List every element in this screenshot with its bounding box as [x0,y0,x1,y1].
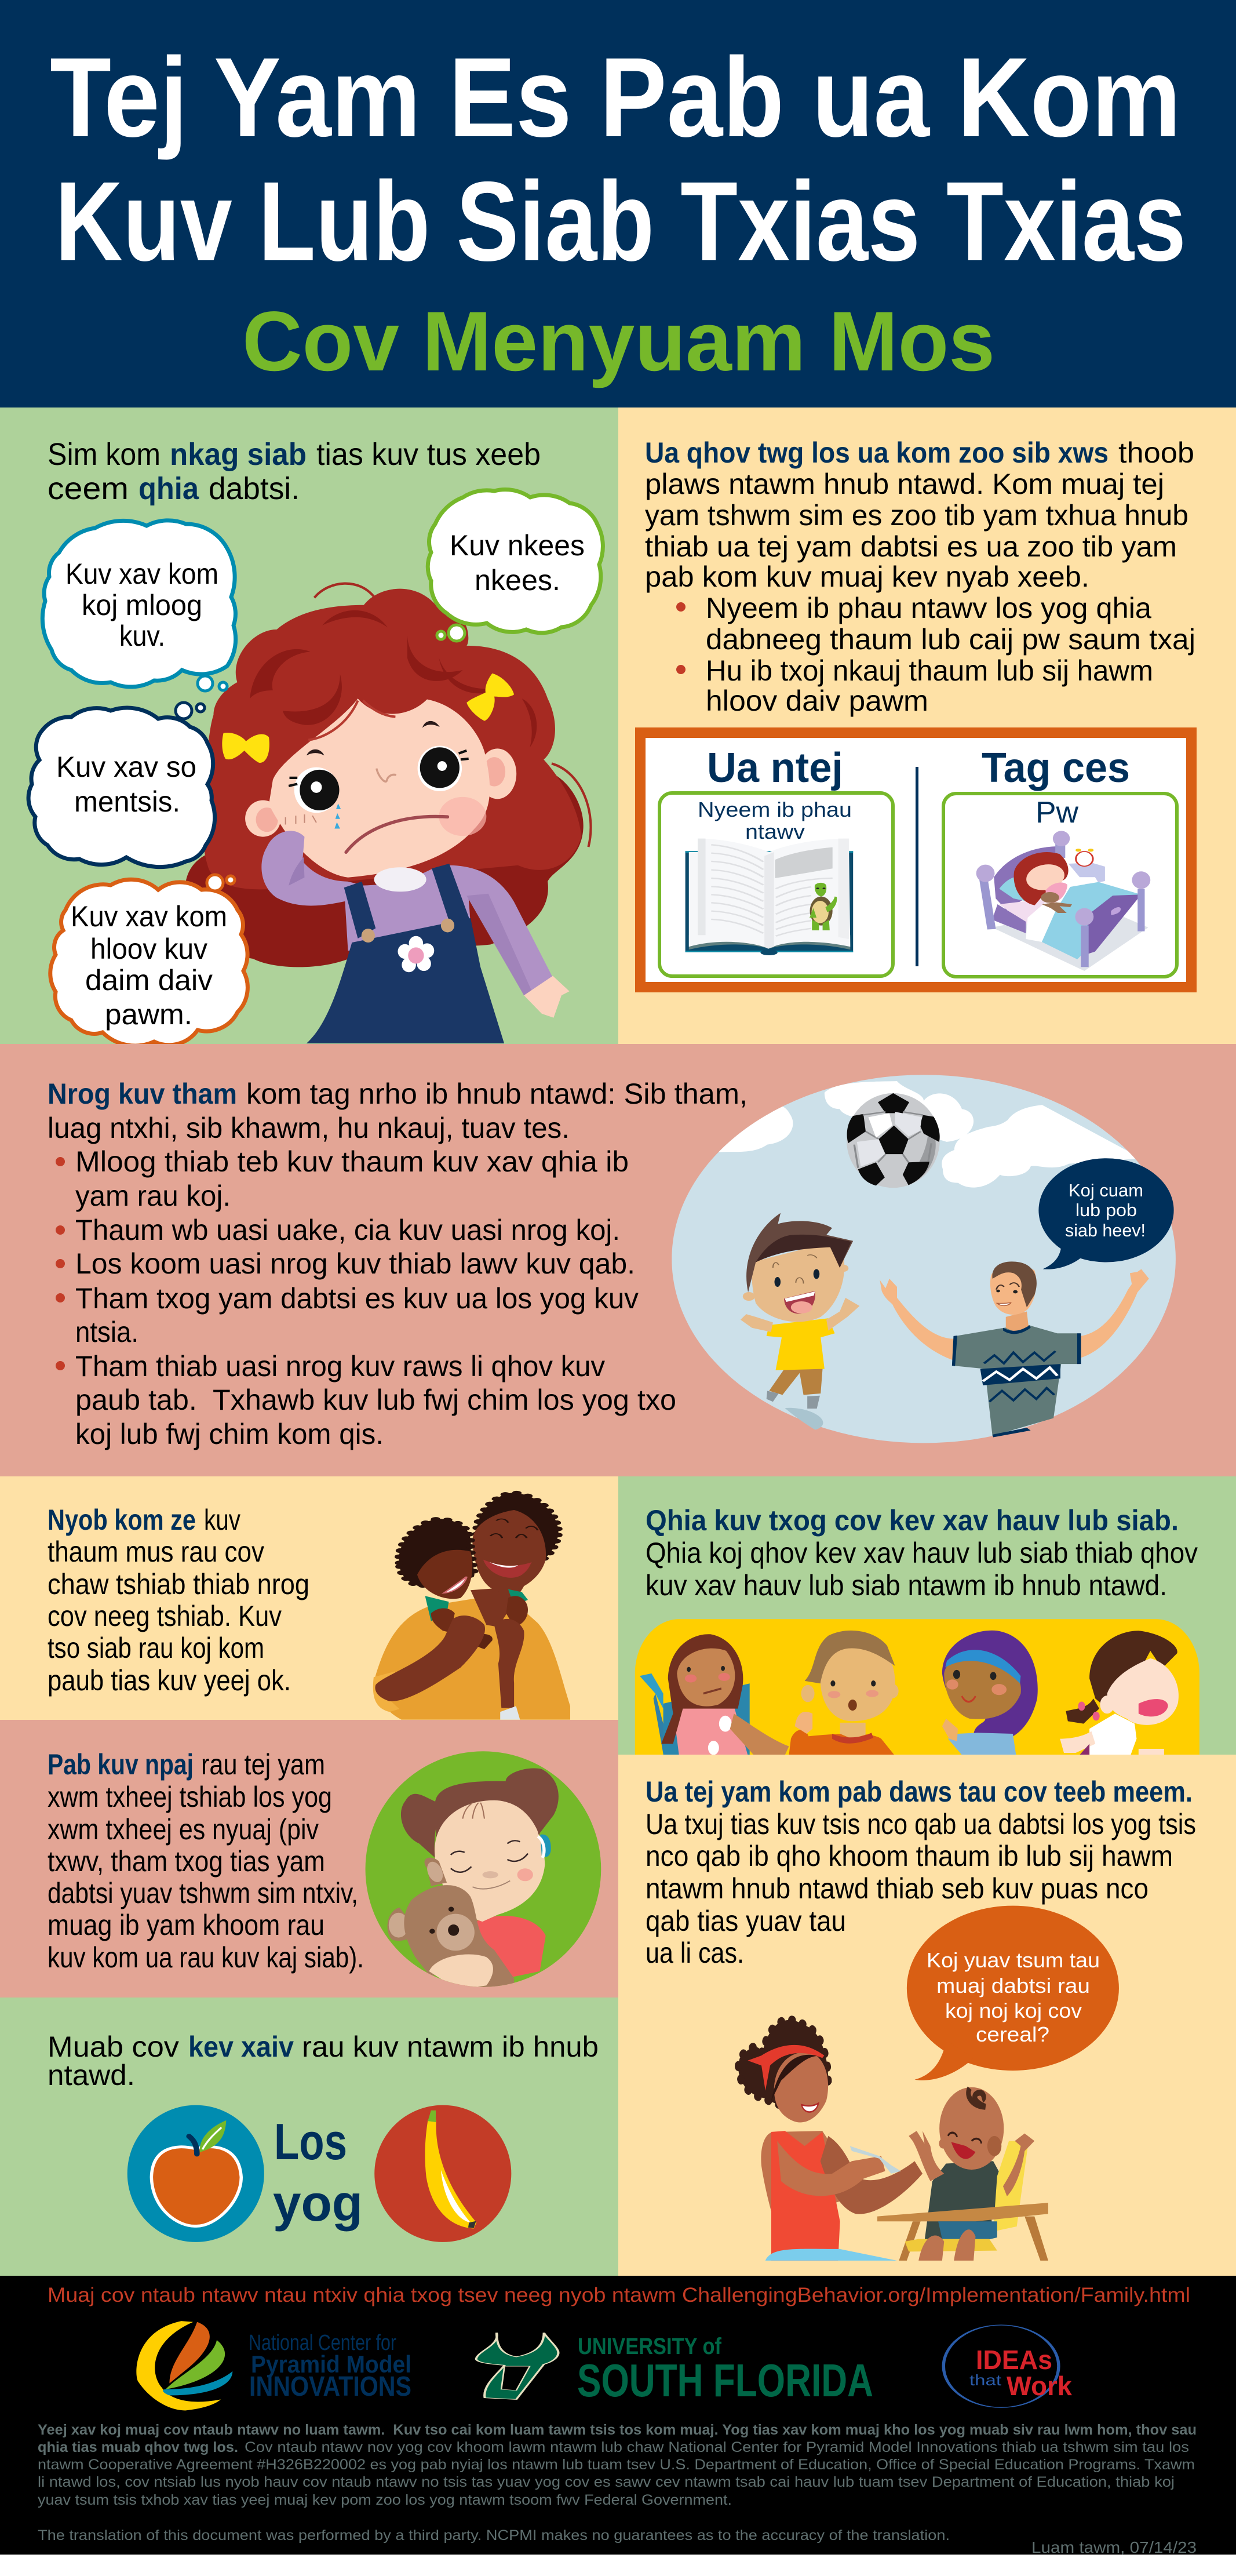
panel: routine [618,407,1236,1044]
card: read a book: ntawv [745,820,805,843]
father [880,1261,1149,1438]
panel: stay close [0,1476,618,1720]
card: read a book: Nyeem ib phau [698,798,852,821]
subtitle: Cov Menyuam Mos [242,294,995,388]
prepare text: rau tej yam [201,1748,325,1781]
play text: Thaum wb uasi uake, cia kuv uasi nrog koj. [75,1214,620,1246]
print date: Luam tawm, 07/14/23 [1031,2538,1197,2556]
routine text: dabneeg thaum lub caij pw saum txaj [706,623,1195,656]
stay close text: thaum mus rau cov [48,1536,264,1568]
routine text: thiab ua tej yam dabtsi es ua zoo tib yam [645,530,1177,563]
icon: apple [127,2105,264,2242]
thought bubble: navy: mentsis. [74,785,180,818]
speech bubble: orange [907,1906,1119,2080]
choices text [48,2031,599,2091]
intro text [48,437,541,506]
prepare text: xwm txheej es nyuaj (piv [48,1813,319,1846]
copyright and disclaimer: li ntawd los, cov ntsiab lus nyob hauv cov ntaub ntawv no tsis tas yuav yog cov es sawv cev ntawm tsab cai hauv lub tuam tsev Department of Education, thiab koj [38,2474,1175,2490]
prepare text: muag ib yam khoom rau [48,1909,325,1941]
intro text: ceem [48,471,129,506]
thought bubble: blue: koj mloog [82,589,202,621]
first-then board [640,733,1191,987]
routine text: thoob [1118,436,1194,469]
routine text [645,436,1195,717]
logo: University of South Florida: UNIVERSITY of [578,2334,722,2359]
copyright and disclaimer: ntawm Cooperative Agreement #H326B220002 es yog pab nyiaj los ntawm lub tuam tsev U.S. Department of Education, Office of Special Education Programs. Txawm [38,2457,1195,2473]
copyright and disclaimer: Yeej xav koj muaj cov ntaub ntawv no luam tawm. Kuv tso cai kom luam tawm tsis tos kom muaj. Yog tias xav kom muaj kho los yog muab siv rau lwm hom, thov sau [38,2422,1197,2438]
thought bubble: green [428,490,603,641]
illustration: crying girl [185,584,591,1043]
icon: child sleeping in bed [976,831,1150,971]
card: sleep [943,794,1177,977]
header panel [0,0,1236,407]
problem solving text [646,1775,1196,1969]
copyright and disclaimer: yuav tsum tsis txhob xav tias yeej muaj kev pom zoo los yog ntawm tsoom fwv Federal Government. [38,2492,732,2508]
illustration: father and son with soccer ball [672,1075,1176,1443]
problem solving text: qab tias yuav tau [646,1905,846,1937]
logo: Pyramid Model Innovations: Pyramid Model [251,2351,411,2378]
choices text: Muab cov [48,2031,179,2063]
then heading: Tag ces [982,745,1130,791]
card: sleep: Pw [1036,796,1078,829]
illustration: parent carrying child [373,1493,570,1720]
emotions text: kuv xav hauv lub siab ntawm ib hnub ntawd. [646,1569,1167,1602]
thought bubble: orange: Kuv xav kom [71,900,227,933]
panel: problem solving: cereal? [976,2022,1049,2046]
intro text: nkag siab [170,437,307,472]
choices text: ntawd. [48,2059,135,2091]
footer panel [0,2276,1236,2556]
more information link: Muaj cov ntaub ntawv ntau ntxiv qhia txog tsev neeg nyob ntawm ChallengingBehavior.org/Implementation/Family.html [48,2284,1190,2306]
thought bubble: blue: Kuv xav kom [65,558,218,590]
stay close text [48,1504,309,1697]
icon: banana [374,2105,511,2242]
logo: IDEAs that Work [943,2325,1072,2407]
panel: play together [0,1044,1236,1476]
emotions text [646,1504,1198,1602]
title [50,34,1186,285]
prepare text: txwv, tham txog tias yam [48,1845,325,1878]
label: or: yog [273,2174,363,2232]
panel: problem solving: Koj yuav tsum tau [927,1948,1100,1972]
soccer ball [847,1093,940,1188]
play text: luag ntxhi, sib khawm, hu nkauj, tuav tes. [48,1112,570,1144]
illustration: children showing emotions [635,1619,1199,1755]
prepare text: dabtsi yuav tshwm sim ntxiv, [48,1877,358,1909]
stay close text: chaw tshiab thiab nrog [48,1568,309,1600]
choices text: kev xaiv [188,2031,294,2063]
play text: kom tag nrho ib hnub ntawd: Sib tham, [246,1078,748,1110]
panel: play together: siab heev! [1065,1220,1146,1240]
logo: Pyramid Model Innovations: INNOVATIONS [249,2371,411,2402]
panel: problem solving: muaj dabtsi rau [936,1974,1090,1998]
copyright and disclaimer: qhia tias muab qhov twg los. [38,2439,238,2455]
logo: IDEAs that Work: IDEAs [976,2345,1052,2375]
play text: koj lub fwj chim kom qis. [75,1418,384,1450]
intro text: tias kuv tus xeeb [316,437,541,472]
panel: name emotions [618,1476,1236,1755]
icon: open book with turtle [686,839,853,955]
stay close text: paub tias kuv yeej ok. [48,1664,291,1697]
illustration: girl hugging teddy [366,1751,601,1996]
boy [741,1213,859,1409]
play text [48,1078,748,1450]
logo: Pyramid Model Innovations [136,2321,411,2410]
speech bubble: navy [1038,1158,1174,1269]
copyright and disclaimer [38,2422,1197,2544]
panel: play together: lub pob [1075,1200,1137,1220]
thought bubble: green: nkees. [475,564,560,596]
logo: University of South Florida: SOUTH FLORIDA [577,2355,873,2406]
play text: Tham txog yam dabtsi es kuv ua los yog kuv [75,1282,639,1315]
intro text: dabtsi. [209,471,300,506]
thought bubble: navy: Kuv xav so [56,751,196,783]
play text: ntsia. [75,1316,138,1348]
first heading: Ua ntej [707,745,843,791]
prepare text: xwm txheej tshiab los yog [48,1781,332,1813]
routine text: Ua qhov twg los ua kom zoo sib xws [645,436,1109,469]
thought bubble: blue [42,521,236,691]
logo: IDEAs that Work: Work [1007,2371,1072,2401]
play text: Tham thiab uasi nrog kuv raws li qhov kuv [75,1350,605,1382]
routine text: pab kom kuv muaj kev nyab xeeb. [645,561,1089,593]
label: or [273,2113,363,2232]
routine text: Nyeem ib phau ntawv los yog qhia [706,592,1151,624]
thought bubble: orange: hloov kuv [90,933,207,965]
panel: problem solving [618,1755,1236,2276]
routine text: plaws ntawm hnub ntawd. Kom muaj tej [645,468,1164,500]
emotions text: Qhia kuv txog cov kev xav hauv lub siab. [646,1504,1179,1537]
copyright and disclaimer: Cov ntaub ntawv nov yog cov khoom lawm ntawm lub chaw National Center for Pyramid Model Innovations thiab ua tshwm sim tau los [245,2439,1189,2455]
panel: problem solving: koj noj koj cov [945,1999,1082,2022]
problem solving text: ua li cas. [646,1937,744,1969]
stay close text: Nyob kom ze [48,1504,196,1536]
intro text: Sim kom [48,437,161,472]
stay close text: cov neeg tshiab. Kuv [48,1600,282,1632]
prepare text: Pab kuv npaj [48,1748,194,1781]
play text: Los koom uasi nrog kuv thiab lawv kuv qab. [75,1247,635,1280]
choices text: rau kuv ntawm ib hnub [302,2031,599,2063]
panel: prepare [0,1720,618,1998]
routine text: hloov daiv pawm [706,685,928,717]
play text: paub tab. Txhawb kuv lub fwj chim los yog txo [75,1384,676,1416]
panel: notice feelings [0,407,618,1046]
thought bubble: navy [28,703,215,867]
routine text: yam tshwm sim es zoo tib yam txhua hnub [645,499,1188,532]
thought bubble: blue: kuv. [119,620,165,652]
card: read a book [659,793,893,976]
panel: choices [0,1998,618,2276]
label: or: Los [274,2113,347,2170]
thought bubble: orange [50,875,247,1046]
problem solving text: nco qab ib qho khoom thaum ib lub sij hawm [646,1840,1173,1872]
thought bubble: green: Kuv nkees [450,529,585,562]
play text: Mloog thiab teb kuv thaum kuv xav qhia ib [75,1145,629,1178]
logo: Pyramid Model Innovations: National Center for [249,2331,396,2355]
problem solving text: ntawm hnub ntawd thiab seb kuv puas nco [646,1872,1149,1905]
illustration: mother feeding baby [738,1906,1119,2261]
copyright and disclaimer: The translation of this document was performed by a third party. NCPMI makes no guarantees as to the accuracy of the translation. [38,2527,950,2544]
thought bubble: orange: pawm. [105,998,192,1031]
prepare text [48,1748,364,1974]
thought bubble: orange: daim daiv [85,964,213,996]
emotions text: Qhia koj qhov kev xav hauv lub siab thiab qhov [646,1537,1198,1569]
logo: University of South Florida [476,2333,873,2406]
play text: yam rau koj. [75,1180,231,1212]
stay close text: tso siab rau koj kom [48,1632,264,1664]
panel: play together: Koj cuam [1069,1180,1143,1200]
prepare text: kuv kom ua rau kuv kaj siab). [48,1941,364,1974]
intro text: qhia [138,471,199,506]
play text: Nrog kuv tham [48,1078,237,1110]
routine text: Hu ib txoj nkauj thaum lub sij hawm [706,654,1153,687]
logo: IDEAs that Work: that [969,2371,1002,2389]
stay close text: kuv [204,1504,240,1536]
